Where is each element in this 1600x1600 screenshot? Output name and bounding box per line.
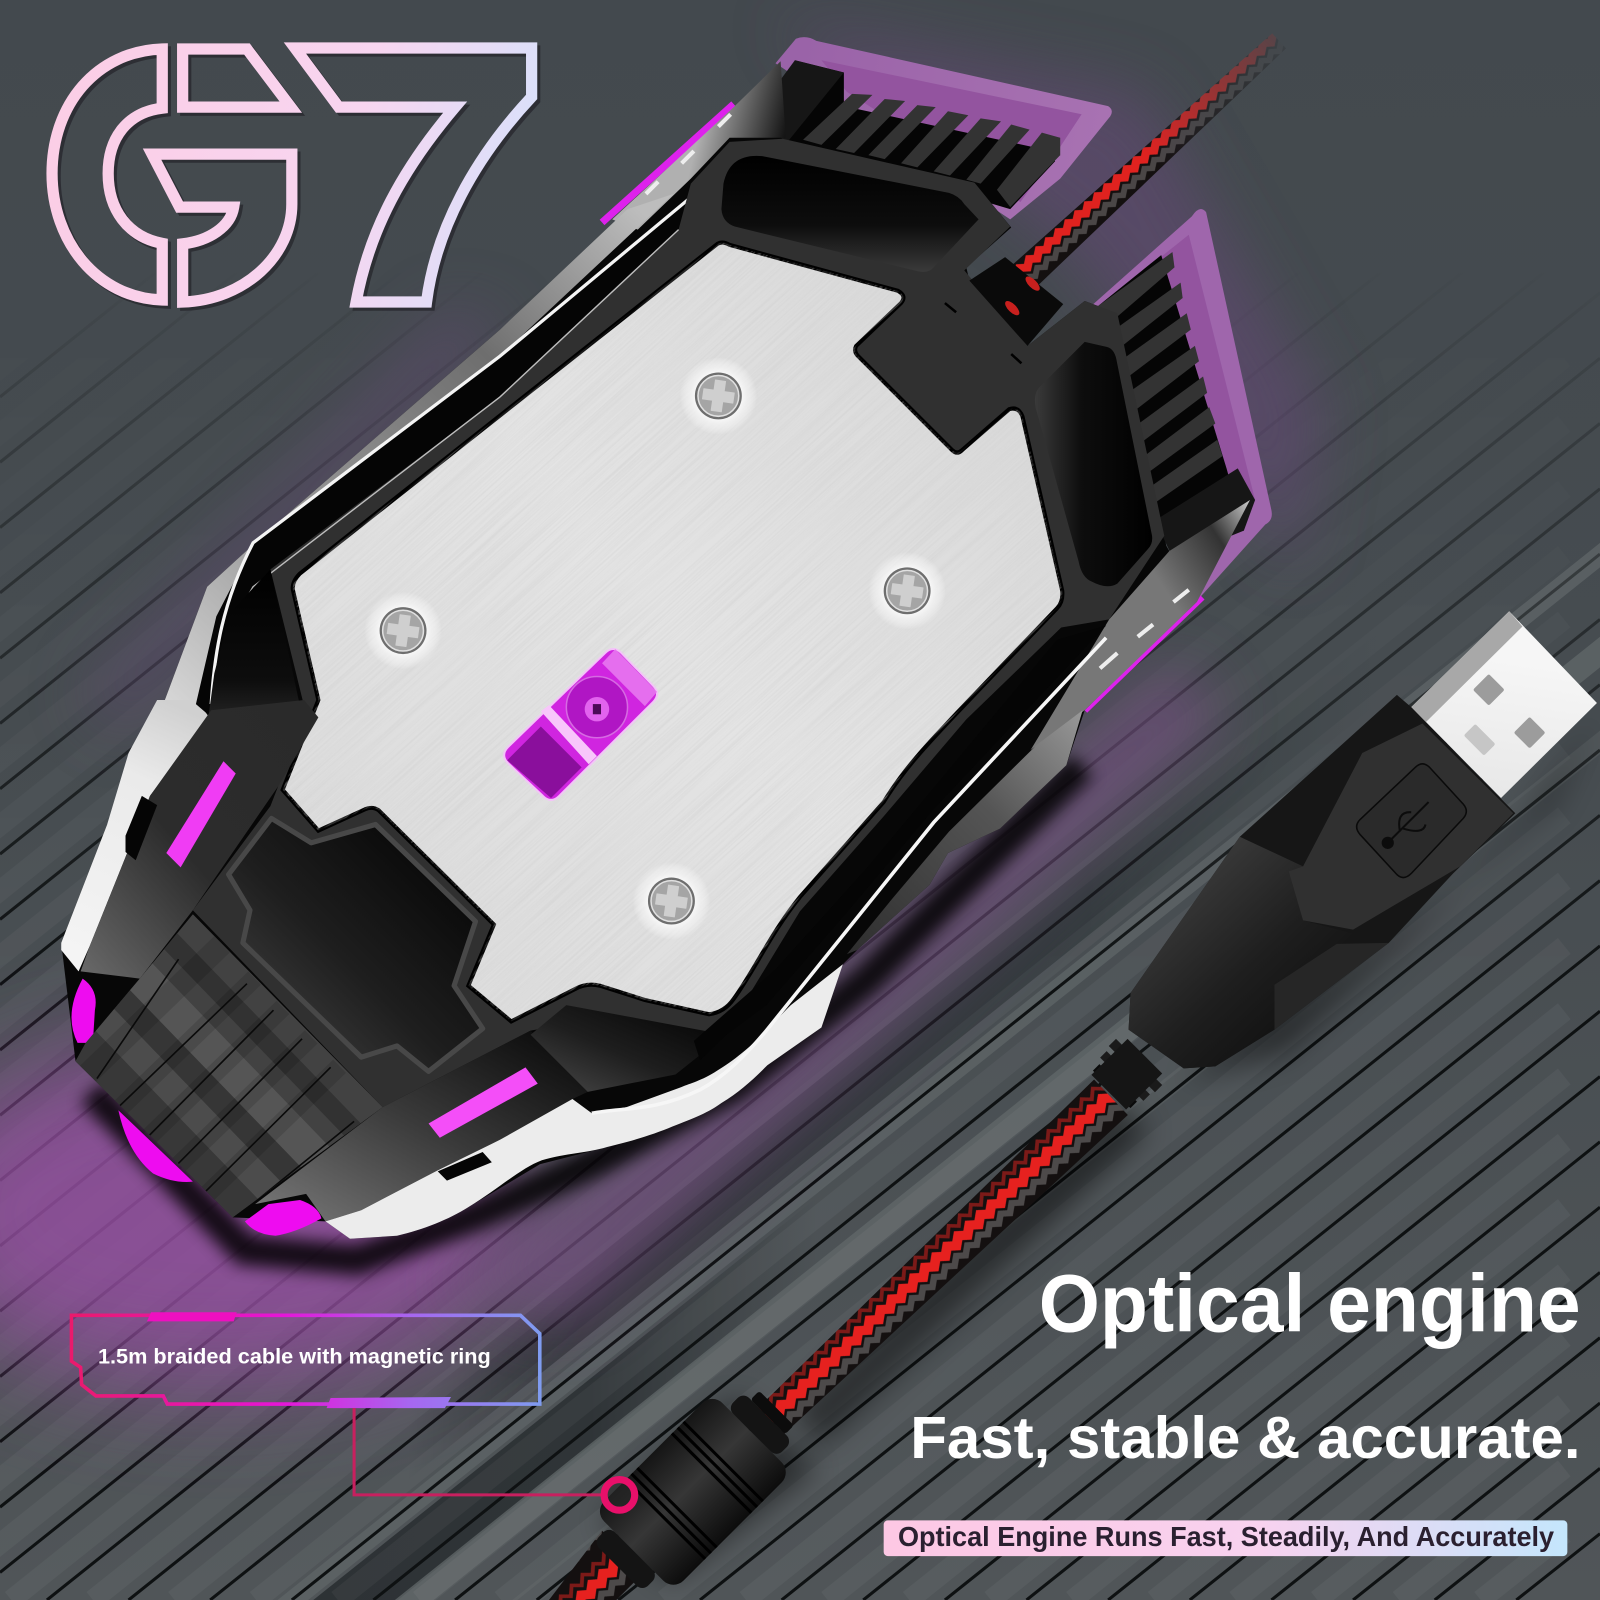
shadows under mouse and cable [92, 714, 1598, 1582]
USB plug [1086, 611, 1597, 1115]
background diagonal bands [278, 543, 1600, 1600]
USB metal lip [1411, 611, 1522, 723]
fin base right [1098, 255, 1244, 531]
translucent purple button top [776, 37, 1112, 219]
screw 2 [868, 552, 946, 630]
pink nose glow right [245, 1200, 321, 1236]
pink nose glow left [71, 979, 96, 1043]
callout text: 1.5m braided cable with magnetic ring [98, 1344, 491, 1368]
left black wedge [207, 569, 300, 755]
logo shadow [55, 51, 535, 305]
inner purple recess right [1112, 235, 1255, 500]
background pinstripe lines [0, 353, 1600, 1600]
callout: braided cable [71, 1312, 635, 1510]
upper-left black channel [196, 201, 689, 716]
letter G left arc [52, 49, 162, 300]
lower braided cable [750, 1080, 1128, 1442]
cable socket [969, 257, 1063, 346]
screw 3 [364, 592, 442, 669]
upper braided cable [1009, 29, 1290, 292]
callout top accent [147, 1312, 237, 1321]
plug lower body shading [1129, 837, 1353, 1068]
ferrite magnetic ring [578, 1368, 816, 1600]
recess right [1035, 342, 1152, 586]
translucent purple button right [1089, 209, 1272, 604]
optical sensor window [504, 649, 657, 800]
callout frame [71, 1315, 540, 1404]
upper-left thin trim line [210, 230, 679, 716]
side wheel [847, 710, 1083, 954]
silver top-left chrome wedge [612, 61, 786, 230]
body rim [193, 139, 1164, 1107]
plug top face [1289, 723, 1513, 930]
magenta side light strips [602, 104, 1202, 710]
left magenta light bar [166, 761, 236, 867]
upper-left white trim line [211, 199, 689, 704]
silver lower-right chrome wedge [1031, 500, 1250, 750]
front stepped block [76, 914, 382, 1218]
left side panel [81, 700, 318, 979]
heading: Optical engine: Optical engine [1039, 1259, 1581, 1350]
fin base top [787, 60, 1055, 209]
fins right [1098, 252, 1255, 559]
central lower recess [229, 818, 483, 1071]
white arrow marks right [1100, 590, 1189, 668]
screw-slot marks [945, 303, 1021, 363]
cable below ferrite [549, 1531, 645, 1600]
purple glow behind mouse [0, 20, 1327, 1388]
left notch [126, 796, 157, 860]
USB contact holes [1464, 674, 1545, 756]
pink nose glow middle [118, 1110, 193, 1182]
screw 4 [633, 862, 710, 940]
tagline text: Optical Engine Runs Fast, Steadily, And Accurately [898, 1521, 1555, 1552]
plug collar [1086, 1033, 1168, 1115]
recess top [721, 156, 979, 272]
lower wedge [531, 1005, 726, 1092]
lower side panel [255, 1031, 588, 1221]
brushed metal plate [280, 240, 1064, 1024]
inner purple recess top [821, 60, 1082, 202]
mouse [17, 37, 1272, 1276]
white lower shell [326, 964, 843, 1239]
fins top [755, 60, 1060, 207]
lower-right white trim line [592, 638, 1106, 1113]
mouse base silhouette [61, 112, 1197, 1239]
numeral 7 [295, 48, 532, 302]
letter G top block [183, 49, 291, 107]
callout bottom accent [327, 1397, 451, 1408]
USB badge [1357, 764, 1466, 878]
lower magenta light bar [429, 1067, 538, 1138]
G7 logo [52, 48, 535, 305]
USB metal shell [1411, 611, 1597, 798]
lower notch [438, 1152, 492, 1181]
USB trident icon [1383, 802, 1429, 848]
silver upper-left shell band [150, 194, 673, 740]
screw 1 [680, 357, 757, 435]
tagline pill [884, 1520, 1567, 1556]
white left shell [61, 700, 209, 971]
lower-right black channel [694, 626, 1106, 1060]
callout ring marker [604, 1480, 635, 1510]
subheading: Fast, stable & accurate: Fast, stable & accurate. [910, 1404, 1581, 1471]
plug lower panel [1274, 943, 1389, 1030]
letter G lower block [152, 154, 292, 302]
white arrow marks top [646, 114, 731, 194]
callout connector line [354, 1408, 602, 1495]
plug overmold [1129, 695, 1515, 1068]
